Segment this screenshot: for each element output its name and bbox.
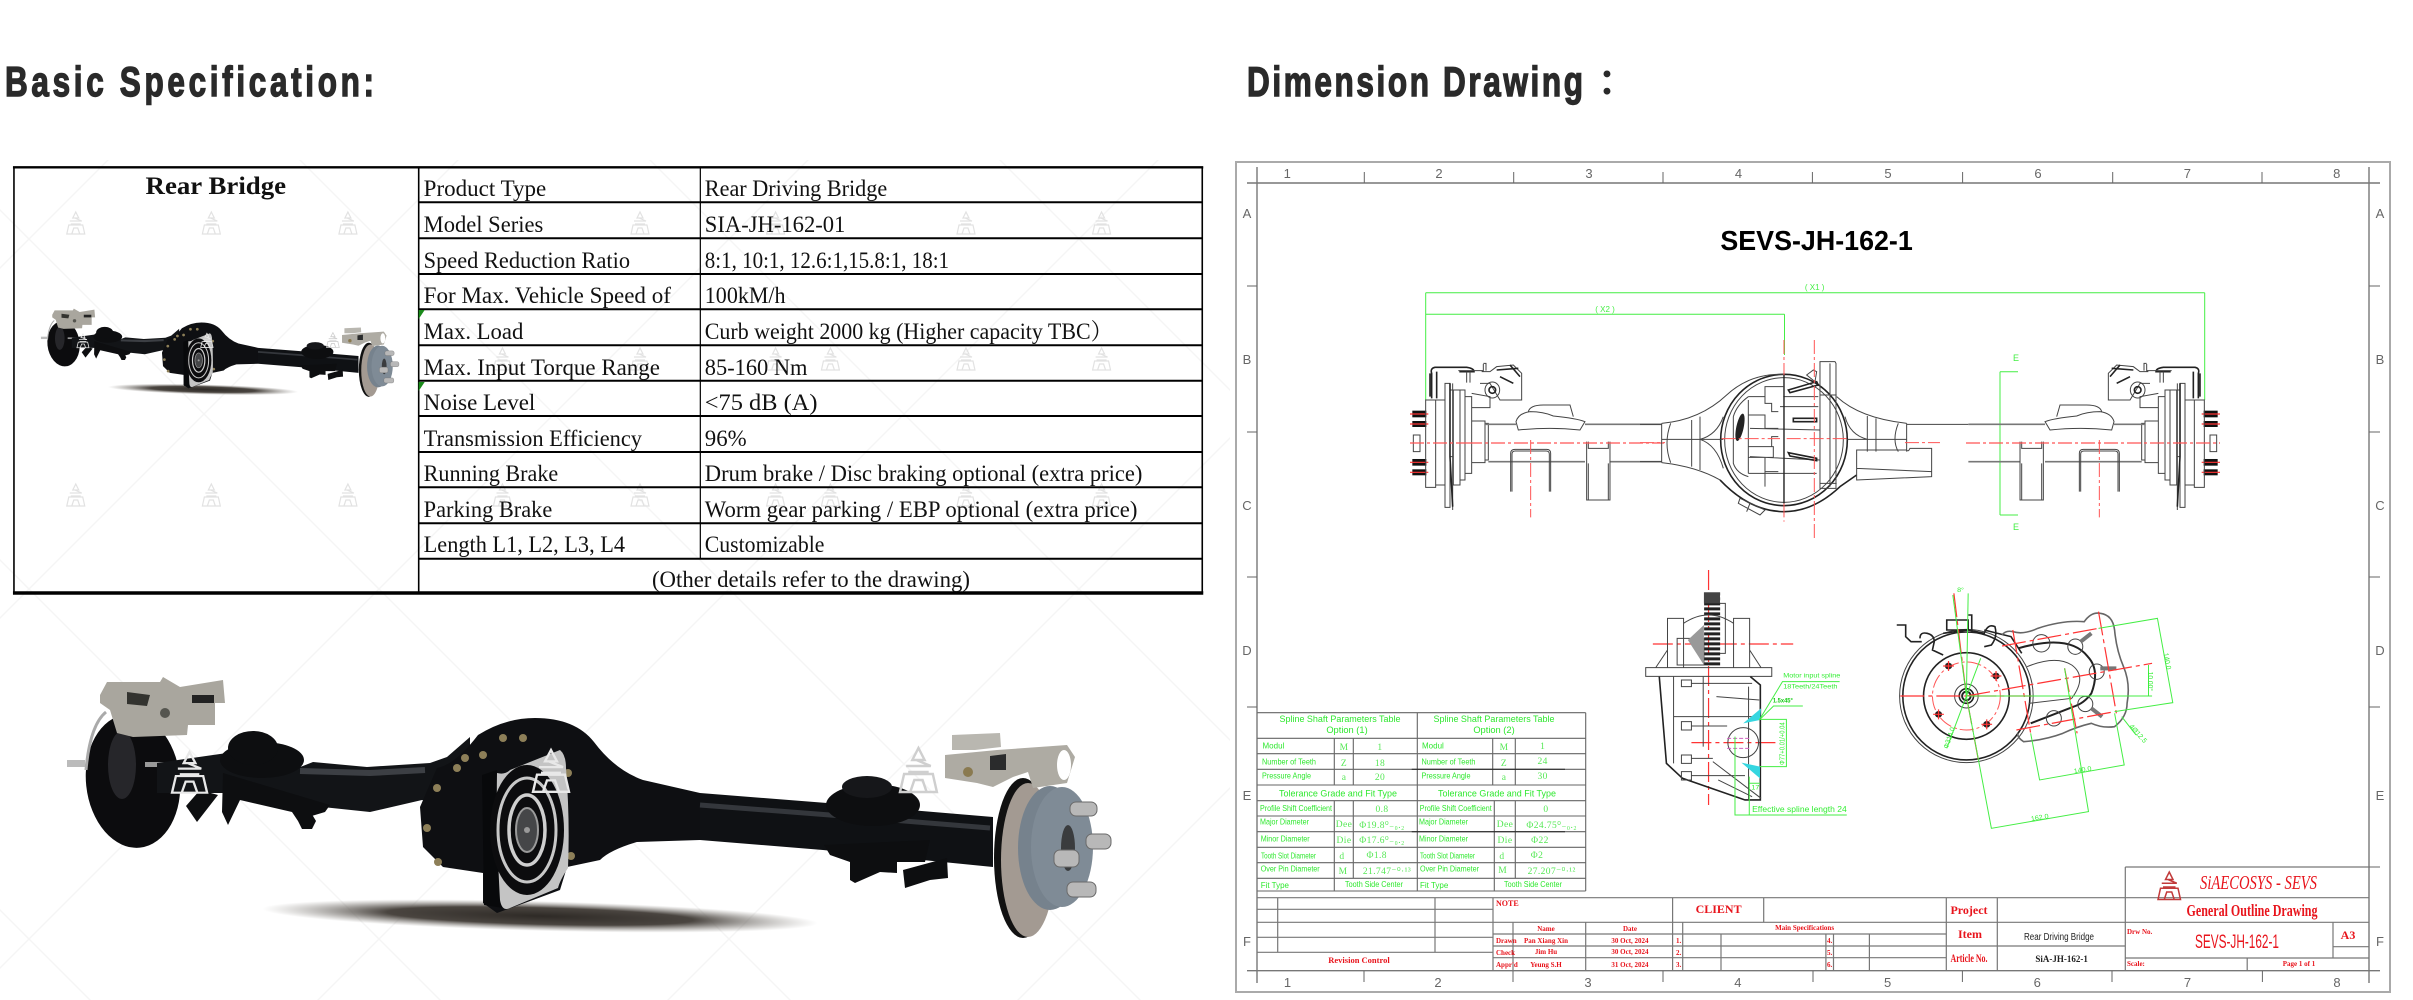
flange dimensions: 10.00° <box>2146 672 2154 691</box>
section view dimensions: Φ77+0.01/+0.04 <box>1779 722 1786 765</box>
column and row markers: 2 <box>1435 166 1443 181</box>
differential cover outline <box>2002 613 2128 742</box>
spline table values: Φ17.6⁰₋₀.₂ <box>1359 835 1405 846</box>
title block red labels: NOTE <box>1496 899 1519 908</box>
column and row markers: 3 <box>1584 975 1592 990</box>
spec row labels: For Max. Vehicle Speed of <box>424 283 671 308</box>
spline table values: M <box>1339 867 1348 877</box>
cell comment markers <box>419 310 425 391</box>
side view of flange and brake <box>1897 586 2173 828</box>
drawing name: General Outline Drawing <box>2186 901 2318 920</box>
dimension lines: E <box>2013 522 2019 532</box>
section view dimensions <box>1735 672 1847 815</box>
spline table values: 0 <box>1543 805 1549 815</box>
centre line <box>1410 442 2220 444</box>
differential housing section <box>1640 340 1968 540</box>
title block red labels: Check <box>1496 949 1515 957</box>
column and row markers: 2 <box>1434 975 1442 990</box>
spec row values: 100kM/h <box>705 283 786 308</box>
column and row markers: 4 <box>1734 975 1742 990</box>
column and row markers: D <box>1242 643 1252 658</box>
axle tube left <box>157 737 470 812</box>
title block grid <box>1257 867 2369 971</box>
section view dimensions: Effective spline length 24 <box>1752 805 1847 814</box>
caliper and cable <box>1897 615 2022 655</box>
title block red labels: Date <box>1623 925 1637 933</box>
title block red labels: Main Specifications <box>1775 924 1834 932</box>
item and article values <box>2024 932 2094 964</box>
heading: dimension drawing: Dimension Drawing <box>1247 58 1583 105</box>
brake disc circles <box>1900 629 2033 763</box>
column and row markers: 1 <box>1284 166 1291 181</box>
spec row labels: Length L1, L2, L3, L4 <box>424 532 626 557</box>
flange dimensions <box>1943 586 2173 828</box>
spline table labels: Number of Teeth <box>1422 758 1476 766</box>
left wheel end <box>1410 363 1662 517</box>
spline table values: 0.8 <box>1375 805 1389 815</box>
column and row markers: 5 <box>1884 975 1891 990</box>
spline table values: a <box>1502 773 1507 783</box>
spline table labels: Pressure Angle <box>1262 772 1311 780</box>
ground shadow <box>262 894 818 938</box>
spec row values: Rear Driving Bridge <box>705 176 887 201</box>
right brake disc and hub <box>994 778 1111 938</box>
spec row labels: Max. Load <box>424 319 524 344</box>
spline table labels: Over Pin Diameter <box>1261 864 1320 874</box>
flange dimensions: 162.0 <box>2030 813 2049 823</box>
spline table labels: Pressure Angle <box>1422 772 1471 780</box>
heading: basic specification: Basic Specification: <box>5 58 374 105</box>
spec row labels: Parking Brake <box>424 497 552 522</box>
flange dimensions: 4Ø12.5 <box>2127 724 2148 745</box>
title block red labels: 3. <box>1676 961 1682 969</box>
background watermark lattice <box>0 160 1230 1000</box>
column and row markers: 5 <box>1884 166 1892 181</box>
spec row labels: Noise Level <box>424 390 535 415</box>
column and row markers: F <box>1243 934 1251 949</box>
section view dimensions: Motor input spline <box>1783 672 1841 679</box>
table watermark logos <box>67 212 1111 506</box>
spline table labels: Tooth Slot Diameter <box>1420 852 1475 860</box>
title block red labels: Revision Control <box>1328 955 1390 965</box>
spline table labels: Over Pin Diameter <box>1420 864 1479 874</box>
spline table values: a <box>1342 773 1347 783</box>
spline table values: Dee <box>1497 820 1513 830</box>
spline table values: 18 <box>1375 759 1385 769</box>
title block red labels: Jim Hu <box>1535 948 1557 956</box>
spec row values: SIA-JH-162-01 <box>705 212 845 237</box>
spline table values: Z <box>1501 759 1507 769</box>
column and row markers: A <box>1243 206 1252 221</box>
panel: dimension drawing sheet <box>1236 162 2390 992</box>
spec row labels: Speed Reduction Ratio <box>424 248 630 273</box>
spline table values: 27.207⁻⁰·¹² <box>1528 866 1576 877</box>
dimension lines: ( X1 ) <box>1805 283 1825 292</box>
front view of axle <box>1410 283 2220 540</box>
spline table labels: Fit Type <box>1420 881 1449 890</box>
flange dimensions: Φ314.0 <box>1943 726 1957 750</box>
title block red labels: Page 1 of 1 <box>2283 960 2316 968</box>
spline table values: M <box>1498 866 1507 876</box>
spline table labels: Major Diameter <box>1260 818 1309 826</box>
spline table values: 20 <box>1375 773 1385 783</box>
column and row markers: B <box>1243 352 1251 367</box>
left caliper <box>100 677 225 737</box>
spline table values: Φ1.8 <box>1366 851 1387 861</box>
title block red labels: CLIENT <box>1696 902 1742 916</box>
drawing title: SEVS-JH-162-1 <box>1720 225 1913 256</box>
spline table labels: Tooth Slot Diameter <box>1261 852 1316 860</box>
column and row markers: D <box>2375 643 2385 658</box>
spline table values: 30 <box>1538 772 1548 782</box>
cover bolts <box>2033 635 2104 726</box>
column and row markers: E <box>2376 788 2385 803</box>
column and row markers: 3 <box>1585 166 1593 181</box>
table grid <box>13 167 1203 593</box>
column and row markers: 7 <box>2184 975 2191 990</box>
left cell title: Rear Bridge <box>146 173 286 200</box>
spline table labels: Minor Diameter <box>1261 834 1310 844</box>
title block red labels: Drw No. <box>2127 928 2153 936</box>
spec row values: (Other details refer to the drawing) <box>652 567 970 592</box>
right spring seat <box>824 776 948 888</box>
spline table labels: Minor Diameter <box>1419 834 1468 844</box>
spline table values: Dee <box>1336 820 1352 830</box>
flange dimensions: 140.0 <box>2073 766 2092 775</box>
sheet frame <box>1236 162 2390 992</box>
column and row markers: F <box>2376 934 2384 949</box>
dimension lines: E <box>2013 353 2019 363</box>
watermark logos on axle <box>172 750 569 793</box>
column and row markers: C <box>1242 498 1252 513</box>
spline table values: d <box>1499 852 1505 862</box>
title block red labels: 5. <box>1827 949 1832 957</box>
spline table labels: Modul <box>1422 742 1444 750</box>
spec row values: Drum brake / Disc braking optional (extra price) <box>705 461 1142 486</box>
title block red labels: 4. <box>1827 937 1832 945</box>
column and row markers: 6 <box>2034 975 2041 990</box>
column and row markers: C <box>2375 498 2385 513</box>
flange dimensions: 8° <box>1957 586 1964 594</box>
small axle photo <box>41 309 399 397</box>
spline table labels: Profile Shift Coefficient <box>1420 804 1492 813</box>
title block red labels: Drawn <box>1496 937 1517 945</box>
spec row labels: Model Series <box>424 212 543 237</box>
spec row labels: Product Type <box>424 176 546 201</box>
section view dimensions: 17 <box>1751 784 1760 791</box>
spline table headings: Spline Shaft Parameters Table <box>1280 714 1400 724</box>
axle tube right <box>700 793 993 867</box>
title block red labels: Yeung S.H <box>1530 961 1562 969</box>
spline table labels: Major Diameter <box>1419 818 1468 826</box>
title block red labels <box>1328 899 2355 969</box>
title block red labels: 30 Oct, 2024 <box>1611 937 1649 945</box>
column and row markers: B <box>2376 352 2384 367</box>
title block red labels: 31 Oct, 2024 <box>1611 961 1649 969</box>
spec row values: 96% <box>705 426 747 451</box>
spec row labels <box>424 176 671 557</box>
spline table values: 1 <box>1540 742 1545 752</box>
spline table values: 24 <box>1538 757 1548 767</box>
spec row labels: Transmission Efficiency <box>424 426 642 451</box>
flange dimensions: 140.0 <box>2161 652 2172 670</box>
title block red labels: Appr'd <box>1496 961 1518 969</box>
panel: specification table <box>13 167 1203 593</box>
title block red labels: A3 <box>2341 928 2355 942</box>
drawing number: SEVS-JH-162-1 <box>2195 932 2279 953</box>
column and row markers: 6 <box>2034 166 2042 181</box>
title block red labels: 30 Oct, 2024 <box>1611 948 1649 956</box>
column and row markers: 8 <box>2333 166 2340 181</box>
housing bolts <box>423 734 575 866</box>
section view of gearbox <box>1646 570 1847 815</box>
spec row values: Worm gear parking / EBP optional (extra price) <box>705 497 1137 522</box>
dimension lines: ( X2 ) <box>1595 305 1615 314</box>
dimension lines <box>1426 283 2205 532</box>
spline table values: d <box>1339 852 1345 862</box>
title block red labels: Item <box>1958 927 1982 941</box>
heading: dimension drawing: ： <box>1598 53 1634 105</box>
differential housing <box>420 718 700 913</box>
spline table values: Φ24.75⁰₋₀.₂ <box>1526 820 1577 831</box>
spline table headings: Option (1) <box>1326 725 1368 735</box>
title block red labels: 1. <box>1676 937 1682 945</box>
helical gear <box>1704 592 1720 667</box>
column and row markers: 4 <box>1735 166 1742 181</box>
section view dimensions: 18Teeth/24Teeth <box>1783 683 1838 690</box>
section view dimensions: 1.5x45° <box>1773 697 1793 705</box>
company logo <box>2158 872 2180 900</box>
right wheel end mirrored <box>1968 363 2220 517</box>
column and row markers: A <box>2376 206 2385 221</box>
spline table values: Z <box>1341 759 1347 769</box>
spline table labels: Profile Shift Coefficient <box>1260 804 1333 813</box>
spline table values: Die <box>1337 836 1351 846</box>
title block red labels: Scale: <box>2127 960 2145 968</box>
table: spline shaft parameters <box>1257 713 1586 891</box>
column and row markers: E <box>1243 788 1252 803</box>
spec row labels: Running Brake <box>424 461 558 486</box>
spec row values: <75 dB (A) <box>705 390 817 415</box>
spline table headings: Tolerance Grade and Fit Type <box>1438 788 1556 798</box>
title block red labels: Name <box>1537 925 1555 933</box>
title block red labels: 2. <box>1676 949 1682 957</box>
spline table values: M <box>1500 743 1509 753</box>
wheel studs <box>1933 661 2001 729</box>
title block red labels: Article No. <box>1950 953 1988 965</box>
right caliper <box>945 733 1075 788</box>
spec row labels: Max. Input Torque Range <box>424 355 660 380</box>
spline table values: Φ19.8⁰₋₀.₂ <box>1359 820 1405 831</box>
title block red labels: Project <box>1950 903 1988 917</box>
title block red labels: Pan Xiang Xin <box>1524 937 1568 945</box>
spline table labels: Fit Type <box>1261 881 1290 890</box>
spline table labels: Modul <box>1262 742 1285 750</box>
spline table labels: Tooth Side Center <box>1345 880 1403 889</box>
company name: SiAECOSYS - SEVS <box>2200 872 2317 894</box>
column and row markers: 8 <box>2333 975 2341 990</box>
spline table headings: Spline Shaft Parameters Table <box>1434 714 1554 724</box>
spline table labels: Number of Teeth <box>1262 758 1316 766</box>
spec row values <box>652 176 1142 592</box>
spline table headings: Tolerance Grade and Fit Type <box>1279 788 1397 798</box>
column and row markers: 1 <box>1284 975 1291 990</box>
spline table grid <box>1257 713 1586 891</box>
spline table labels <box>1260 742 1562 890</box>
spline table labels: Tooth Side Center <box>1504 880 1562 889</box>
spline table headings <box>1279 714 1556 798</box>
column and row markers <box>1242 166 2385 990</box>
spline table values: 21.747⁻⁰·¹³ <box>1363 866 1411 877</box>
left spring seat <box>186 731 330 829</box>
spline table values: Φ2 <box>1531 851 1543 861</box>
spec row values: Customizable <box>705 532 824 557</box>
spline table headings: Option (2) <box>1473 725 1515 735</box>
spec row values: Curb weight 2000 kg (Higher capacity TBC） <box>705 319 1113 344</box>
spline table values: 1 <box>1377 743 1383 753</box>
spline table values: M <box>1340 743 1349 753</box>
spec row values: 85-160 Nm <box>705 355 808 380</box>
spline table values: Φ22 <box>1531 836 1549 846</box>
large rear axle illustration <box>67 677 1111 938</box>
left brake disc <box>67 709 187 853</box>
title block <box>1257 867 2369 971</box>
spline table values: Die <box>1498 836 1512 846</box>
column and row markers: 7 <box>2184 166 2191 181</box>
spec row values: 8:1, 10:1, 12.6:1,15.8:1, 18:1 <box>705 248 949 273</box>
title block red labels: 6. <box>1827 961 1832 969</box>
centre lines <box>1900 593 2152 763</box>
flange plate with rings <box>482 750 569 909</box>
item and article values: SiA-JH-162-1 <box>2035 954 2088 964</box>
spline table values <box>1336 742 1577 877</box>
item and article values: Rear Driving Bridge <box>2024 932 2094 943</box>
